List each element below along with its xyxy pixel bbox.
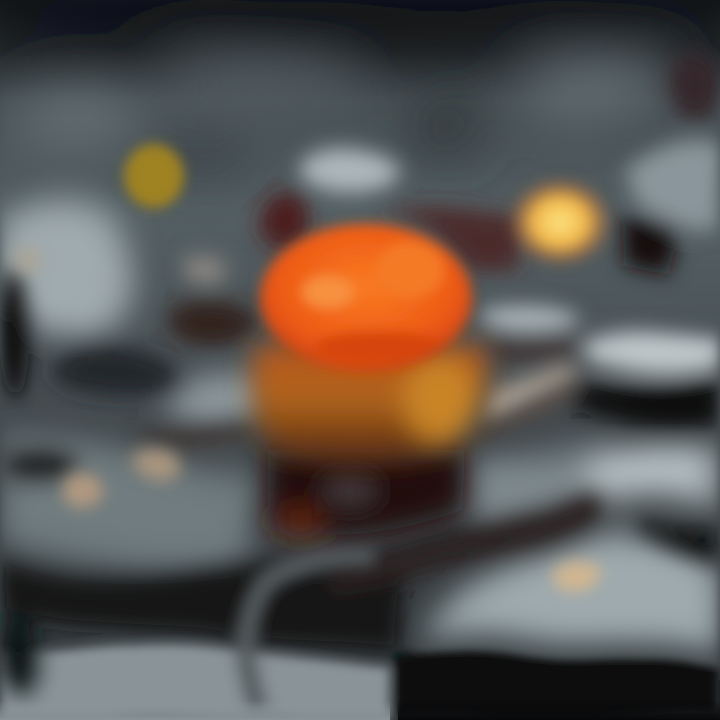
left dark object (0, 270, 175, 400)
jar orange lid (260, 224, 472, 372)
jar amber body (252, 345, 487, 465)
jar lower dark base (268, 450, 465, 538)
dark red blobs around jar (140, 194, 580, 443)
bottom right shadow (395, 649, 720, 720)
glowing light (506, 176, 614, 268)
jar (252, 224, 487, 538)
bottom edge strip left (0, 700, 390, 720)
dark shadow bands (0, 455, 720, 690)
background: upper haze (5, 0, 715, 172)
cream pieces (14, 244, 601, 586)
pale blob behind jar (298, 150, 402, 194)
left pale mound (0, 199, 129, 336)
bottom edge strip right (398, 700, 720, 720)
pale patches near jar (181, 256, 582, 420)
loop handle (248, 559, 370, 712)
right objects (575, 55, 720, 429)
diagonal utensil arms (340, 390, 585, 580)
yellow orb (124, 144, 184, 208)
bottom left tabletop (0, 647, 390, 720)
lower tabletop (0, 370, 720, 660)
